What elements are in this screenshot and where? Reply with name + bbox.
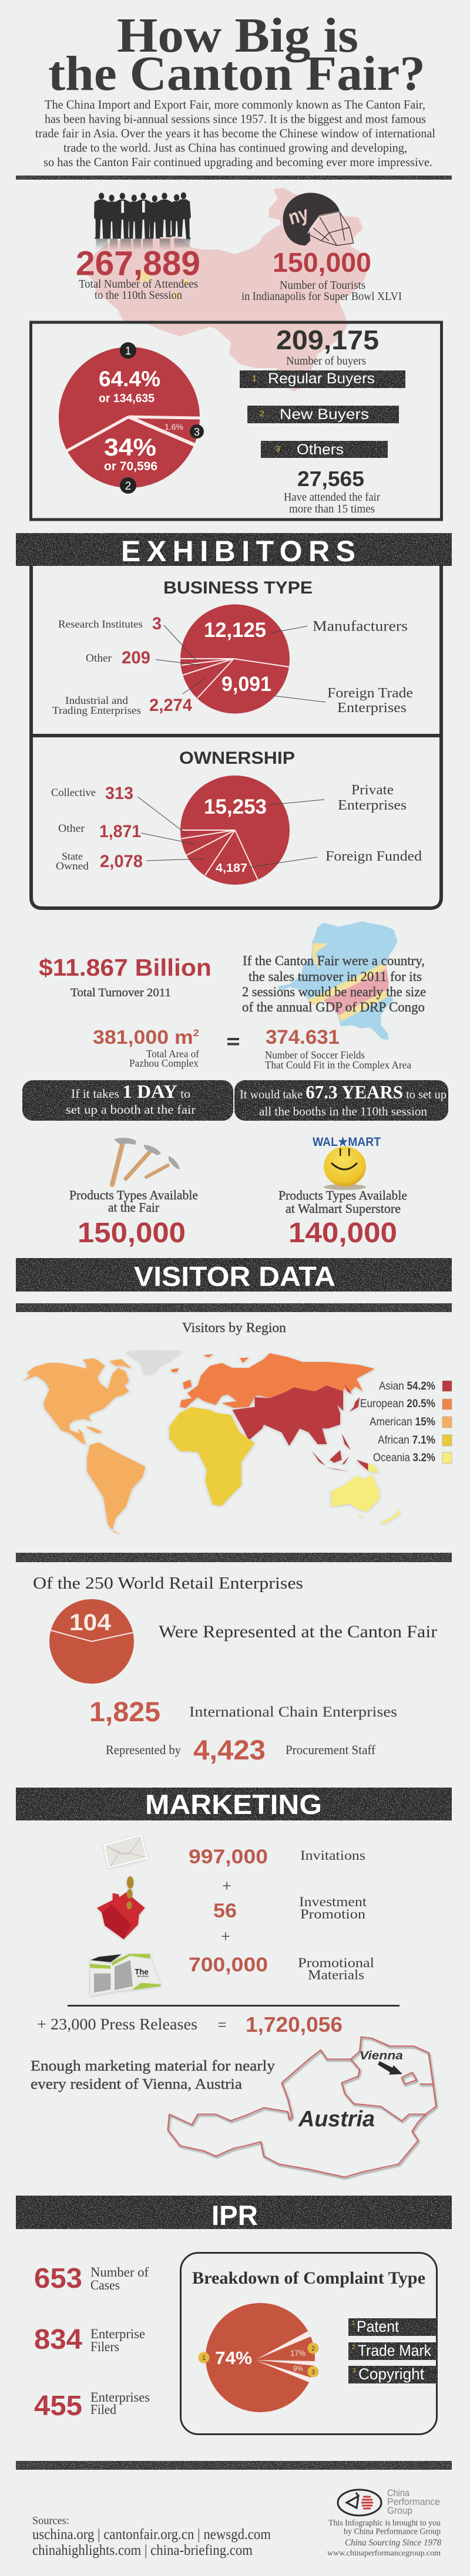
stat: products at fair: at the Fair xyxy=(108,1200,160,1215)
pie chart: ownership: 4,187 xyxy=(216,862,247,875)
legend: patent xyxy=(348,2318,437,2336)
heading: exhibitors: EXHIBITORS xyxy=(121,535,355,568)
stat: repeat attendees: Have attended the fair xyxy=(284,491,380,504)
stat: promotional materials: Materials xyxy=(308,1968,364,1982)
heading: world retail enterprises: Of the 250 World Retail Enterprises xyxy=(33,1574,303,1593)
pie chart: complaint type xyxy=(199,2303,318,2412)
legend: others: Others xyxy=(297,441,344,458)
stat: procurement staff: Represented by xyxy=(106,1742,181,1757)
label: state owned: 2,078 xyxy=(100,852,143,871)
text: represented: Were Represented at the Canton Fair xyxy=(159,1622,437,1641)
legend: others xyxy=(261,441,388,458)
icon: brochure xyxy=(90,1954,160,1996)
stat: tourists: in Indianapolis for Super Bowl XLVI xyxy=(241,290,402,303)
stat: enterprises filed: 455 xyxy=(34,2390,82,2422)
map stars xyxy=(135,265,189,299)
legend: visitors by region xyxy=(360,1380,452,1464)
callout: one day booth: set up a booth at the fair xyxy=(66,1102,196,1117)
label: research institutes: 3 xyxy=(152,614,162,633)
callout: 67.3 years xyxy=(234,1080,448,1121)
equals sign xyxy=(227,1038,239,1045)
credits: China Sourcing Since 1978 xyxy=(345,2538,441,2548)
legend: trade mark: Trade Mark xyxy=(358,2342,431,2359)
pie chart: ownership xyxy=(180,776,290,885)
stat: total area: Pazhou Complex xyxy=(129,1057,199,1069)
intro text xyxy=(35,97,435,169)
stat: invitations xyxy=(189,1846,365,1868)
plus sign: + xyxy=(222,1877,231,1896)
stat: products at fair xyxy=(69,1188,198,1249)
stat: cases: Number of xyxy=(90,2265,149,2280)
stat: procurement staff xyxy=(106,1734,376,1765)
legend item: american: American 15% xyxy=(370,1416,435,1428)
heading: exhibitors xyxy=(16,533,452,568)
stat: soccer fields: 374.631 xyxy=(266,1026,340,1048)
credits: This Infographic is brought to you xyxy=(328,2518,441,2528)
label: state owned: Owned xyxy=(56,860,89,872)
stat: enterprises filed: Enterprises xyxy=(90,2390,150,2405)
label: private enterprises xyxy=(338,783,407,813)
pie chart: buyers: or 70,596 xyxy=(104,460,157,473)
stat: products at walmart: at Walmart Superstore xyxy=(286,1201,401,1216)
stat: total area: 381,000 m xyxy=(93,1026,186,1048)
stat: cases: Cases xyxy=(90,2278,120,2292)
legend: copyright: Copyright xyxy=(358,2365,424,2383)
stat: press releases total: 1,720,056 xyxy=(246,2012,343,2036)
stat: total turnover xyxy=(39,954,212,999)
pie chart: buyers: 1.6% xyxy=(164,422,183,431)
label: state owned: State xyxy=(62,850,83,862)
label: collective xyxy=(51,784,133,803)
panel: buyers xyxy=(31,322,442,520)
icon: brochure: The xyxy=(135,1967,149,1976)
legend: others: 3 xyxy=(276,444,280,453)
sources xyxy=(32,2515,271,2558)
stat: enterprise filers: 834 xyxy=(34,2324,82,2355)
stat: attendees: Total Number of Attendees xyxy=(79,278,198,291)
pie chart: buyers: 64.4% xyxy=(99,367,160,391)
icon: walmart smiley xyxy=(313,1135,381,1190)
label: other xyxy=(58,822,141,841)
stat: total area: 2 xyxy=(193,1027,199,1039)
stat: tourists: 150,000 xyxy=(273,247,371,278)
callout: 67.3 years: all the booths in the 110th session xyxy=(259,1104,427,1118)
legend item: asian: Asian 54.2% xyxy=(379,1380,435,1392)
panel: breakdown of complaint type xyxy=(181,2253,437,2434)
stat: tourists xyxy=(241,247,402,303)
stat: products at fair: Products Types Available xyxy=(69,1188,198,1202)
stat: investment promotion: Promotion xyxy=(300,1907,366,1921)
stat: investment promotion xyxy=(213,1894,367,1922)
world map xyxy=(22,1350,400,1534)
intro text: has been having bi-annual sessions since 1957. It is the biggest and most famous xyxy=(45,112,426,126)
pie chart: buyers: or 134,635 xyxy=(99,392,155,405)
stat: repeat attendees: more than 15 times xyxy=(289,503,375,515)
stat: attendees: 267,889 xyxy=(76,244,200,283)
label: austria: Austria xyxy=(298,2107,375,2132)
legend item: oceania: Oceania 3.2% xyxy=(373,1452,435,1464)
region: oceania xyxy=(331,1464,400,1524)
stat: tourists: Number of Tourists xyxy=(280,279,365,292)
label: other: 209 xyxy=(122,648,150,667)
stat: total area: Total Area of xyxy=(146,1048,199,1060)
stat: procurement staff: Procurement Staff xyxy=(286,1742,376,1757)
sources: chinahighlights.com | china-briefing.com xyxy=(32,2543,253,2558)
pie chart: complaint type: 1 xyxy=(202,2355,206,2362)
label: collective: Collective xyxy=(51,787,96,799)
intro text: The China Import and Export Fair, more commonly known as The Canton Fair, xyxy=(45,97,425,112)
stat: soccer fields: Number of Soccer Fields xyxy=(265,1049,365,1061)
legend: patent: Patent xyxy=(357,2318,399,2335)
icon: football helmet xyxy=(283,193,354,245)
austria outline xyxy=(168,2037,436,2177)
label: foreign trade enterprises: Foreign Trade xyxy=(327,686,413,701)
heading: marketing xyxy=(16,1788,452,1820)
region: europe xyxy=(171,1353,375,1408)
pie chart: buyers: 34% xyxy=(104,433,156,461)
pie chart: business type: 12,125 xyxy=(204,619,266,642)
stat: products at walmart: 140,000 xyxy=(288,1218,397,1249)
pie chart: buyers: 1 xyxy=(125,345,131,358)
label: other: Other xyxy=(86,652,112,665)
stat: number of buyers: Number of buyers xyxy=(286,355,366,367)
panel: exhibitors frame xyxy=(31,564,441,908)
label: foreign trade enterprises: Enterprises xyxy=(337,700,407,716)
text: congo comparison: of the annual GDP of DRP Congo xyxy=(242,1000,425,1014)
stat: press releases total: = xyxy=(217,2016,227,2034)
heading: marketing: MARKETING xyxy=(145,1789,322,1820)
label: foreign trade enterprises xyxy=(327,686,413,716)
stat: cases: 653 xyxy=(34,2263,82,2294)
icon: hammers xyxy=(112,1138,180,1185)
text: vienna comparison xyxy=(31,2058,276,2092)
credits xyxy=(327,2518,441,2558)
callout: one day booth xyxy=(22,1080,233,1121)
stat: enterprise filers xyxy=(34,2324,145,2355)
austria map xyxy=(168,2037,436,2177)
label: industrial and trading xyxy=(52,694,192,716)
stat: investment promotion: Investment xyxy=(299,1894,367,1909)
intro text: so has the Canton Fair continued upgrading and becoming ever more impressive. xyxy=(43,155,432,169)
sources: uschina.org | cantonfair.org.cn | newsgd.com xyxy=(32,2527,271,2543)
stat: total turnover: $11.867 Billion xyxy=(39,954,212,981)
region: asia xyxy=(232,1384,368,1472)
label: manufacturers: Manufacturers xyxy=(313,619,408,634)
arrow: to vienna xyxy=(378,2061,402,2075)
heading: business type: BUSINESS TYPE xyxy=(163,578,313,598)
label: other xyxy=(86,648,150,667)
label: state owned xyxy=(56,850,143,872)
heading: breakdown: Breakdown of Complaint Type xyxy=(192,2268,425,2288)
heading: ipr xyxy=(16,2196,452,2231)
leader lines xyxy=(156,625,325,702)
label: vienna: Vienna xyxy=(360,2049,403,2062)
icon: football helmet: ny xyxy=(286,202,311,230)
callout: one day booth: If it takes 1 DAY to xyxy=(71,1081,190,1102)
stat: chain enterprises xyxy=(89,1696,397,1727)
stat: cases xyxy=(34,2263,149,2294)
legend: patent: 1 xyxy=(352,2320,355,2327)
stat: total turnover: Total Turnover 2011 xyxy=(70,986,171,999)
pie chart: complaint type: 74% xyxy=(215,2348,252,2368)
pie chart: retail enterprises: 104 xyxy=(69,1610,112,1636)
heading: visitor data: VISITOR DATA xyxy=(134,1261,335,1292)
label: industrial and trading: Industrial and xyxy=(65,694,128,706)
title: the Canton Fair? xyxy=(48,46,425,101)
congo map with flag xyxy=(278,921,398,1040)
label: collective: 313 xyxy=(105,784,133,803)
stat: total area xyxy=(93,1026,199,1069)
intro text: trade to the world. Just as China has continued growing and developing, xyxy=(63,141,407,155)
heading: visitor data xyxy=(16,1258,452,1292)
icon: brochure: Brochure xyxy=(137,1975,149,1978)
heading: ipr: IPR xyxy=(212,2200,258,2231)
legend: regular buyers xyxy=(240,370,405,388)
stat: repeat attendees xyxy=(284,467,380,515)
pie chart: ownership: 15,253 xyxy=(204,795,267,818)
text: vienna comparison: every resident of Vienna, Austria xyxy=(31,2076,242,2092)
stat: press releases total: + 23,000 Press Releases xyxy=(37,2015,197,2033)
stat: repeat attendees: 27,565 xyxy=(297,467,364,491)
title: How Big is xyxy=(117,8,358,63)
stat: soccer fields: That Could Fit in the Complex Area xyxy=(265,1059,411,1071)
legend item: african: African 7.1% xyxy=(378,1434,435,1447)
heading: ownership: OWNERSHIP xyxy=(179,748,295,768)
credits: by China Performance Group xyxy=(344,2527,441,2536)
stat: number of buyers: 209,175 xyxy=(276,325,379,355)
stat: press releases total xyxy=(37,2012,343,2036)
pie chart: buyers: 3 xyxy=(194,426,200,438)
label: foreign funded: Foreign Funded xyxy=(325,849,422,864)
text: congo comparison: 2 sessions would be nearly the size xyxy=(242,984,426,999)
china map background xyxy=(84,188,368,392)
stat: invitations: Invitations xyxy=(300,1848,365,1863)
legend: new buyers xyxy=(247,406,399,423)
stat: promotional materials xyxy=(189,1954,374,1982)
sources: Sources: xyxy=(32,2515,69,2527)
icon: walmart smiley: WAL★MART xyxy=(313,1135,381,1149)
stat: invitations: 997,000 xyxy=(189,1846,268,1868)
label: industrial and trading: Trading Enterprises xyxy=(52,704,141,716)
stat: enterprises filed xyxy=(34,2390,150,2422)
text: congo comparison: If the Canton Fair were a country, xyxy=(243,953,425,968)
credits: www.chinaperformancegroup.com xyxy=(327,2549,441,2558)
label: private enterprises: Enterprises xyxy=(338,798,407,813)
title xyxy=(48,8,425,101)
pie chart: buyers xyxy=(59,342,204,494)
pie chart: complaint type: 9% xyxy=(293,2364,303,2373)
stat: attendees: to the 110th Session xyxy=(95,289,182,302)
region: greenland xyxy=(126,1350,182,1375)
stat: products at fair: 150,000 xyxy=(78,1218,186,1249)
leader lines xyxy=(137,797,324,868)
label: industrial and trading: 2,274 xyxy=(149,696,192,715)
legend: regular buyers: 1 xyxy=(252,373,257,383)
label: private enterprises: Private xyxy=(351,783,394,798)
legend: regular buyers: Regular Buyers xyxy=(268,370,375,387)
stat: products at walmart xyxy=(278,1188,407,1249)
intro text: trade fair in Asia. Over the years it has become the Chinese window of international xyxy=(35,126,435,140)
stat: enterprise filers: Enterprise xyxy=(90,2327,145,2341)
label: research institutes: Research Institutes xyxy=(58,618,143,630)
stat: products at walmart: Products Types Available xyxy=(278,1188,407,1202)
icon: envelope xyxy=(104,1835,147,1868)
legend item: european: European 20.5% xyxy=(360,1398,435,1410)
region: americas xyxy=(22,1358,145,1534)
pie chart: complaint type: 3 xyxy=(311,2369,315,2376)
panel: ownership xyxy=(51,748,422,885)
legend: new buyers: New Buyers xyxy=(280,406,369,423)
pie chart: complaint type: 17% xyxy=(290,2348,306,2358)
stat: enterprises filed: Filed xyxy=(90,2402,116,2417)
legend: copyright: 3 xyxy=(352,2368,356,2374)
stat: chain enterprises: 1,825 xyxy=(89,1696,160,1727)
pie chart: buyers: 2 xyxy=(125,480,131,493)
attendees silhouettes xyxy=(94,193,191,251)
callout: 67.3 years: It would take 67.3 YEARS to set up xyxy=(240,1081,446,1102)
text: congo comparison xyxy=(242,953,426,1014)
label: other: Other xyxy=(58,822,85,835)
label: other: 1,871 xyxy=(99,822,141,841)
stat: number of buyers xyxy=(276,325,379,367)
text: congo comparison: the sales turnover in 2011 for its xyxy=(249,969,422,984)
stat: procurement staff: 4,423 xyxy=(193,1734,266,1765)
pie chart: business type xyxy=(180,605,290,714)
logo: china performance group: China xyxy=(387,2487,409,2499)
pie chart: retail enterprises xyxy=(49,1599,134,1684)
heading: visitors by region: Visitors by Region xyxy=(182,1320,287,1335)
stat: chain enterprises: International Chain Enterprises xyxy=(189,1704,397,1720)
panel: business type xyxy=(52,578,413,716)
region: africa xyxy=(169,1407,255,1506)
stat: investment promotion: 56 xyxy=(213,1900,237,1922)
label: research institutes xyxy=(58,614,162,633)
stat: soccer fields xyxy=(265,1026,411,1071)
pie chart: complaint type: 2 xyxy=(311,2345,315,2352)
logo: china performance group: Performance xyxy=(387,2496,440,2507)
plus sign: + xyxy=(221,1928,230,1946)
stat: enterprise filers: Filers xyxy=(90,2339,119,2354)
legend: new buyers: 2 xyxy=(260,409,264,418)
pie chart: business type: 9,091 xyxy=(221,673,271,696)
stat: promotional materials: Promotional xyxy=(298,1955,374,1970)
text: vienna comparison: Enough marketing material for nearly xyxy=(31,2058,276,2074)
legend: trade mark: 2 xyxy=(352,2344,355,2351)
stat: attendees xyxy=(76,244,200,302)
logo: china performance group: Group xyxy=(387,2505,412,2516)
logo: china performance group xyxy=(338,2487,440,2516)
icon: red house and coins xyxy=(97,1876,145,1939)
stat: promotional materials: 700,000 xyxy=(189,1954,268,1976)
